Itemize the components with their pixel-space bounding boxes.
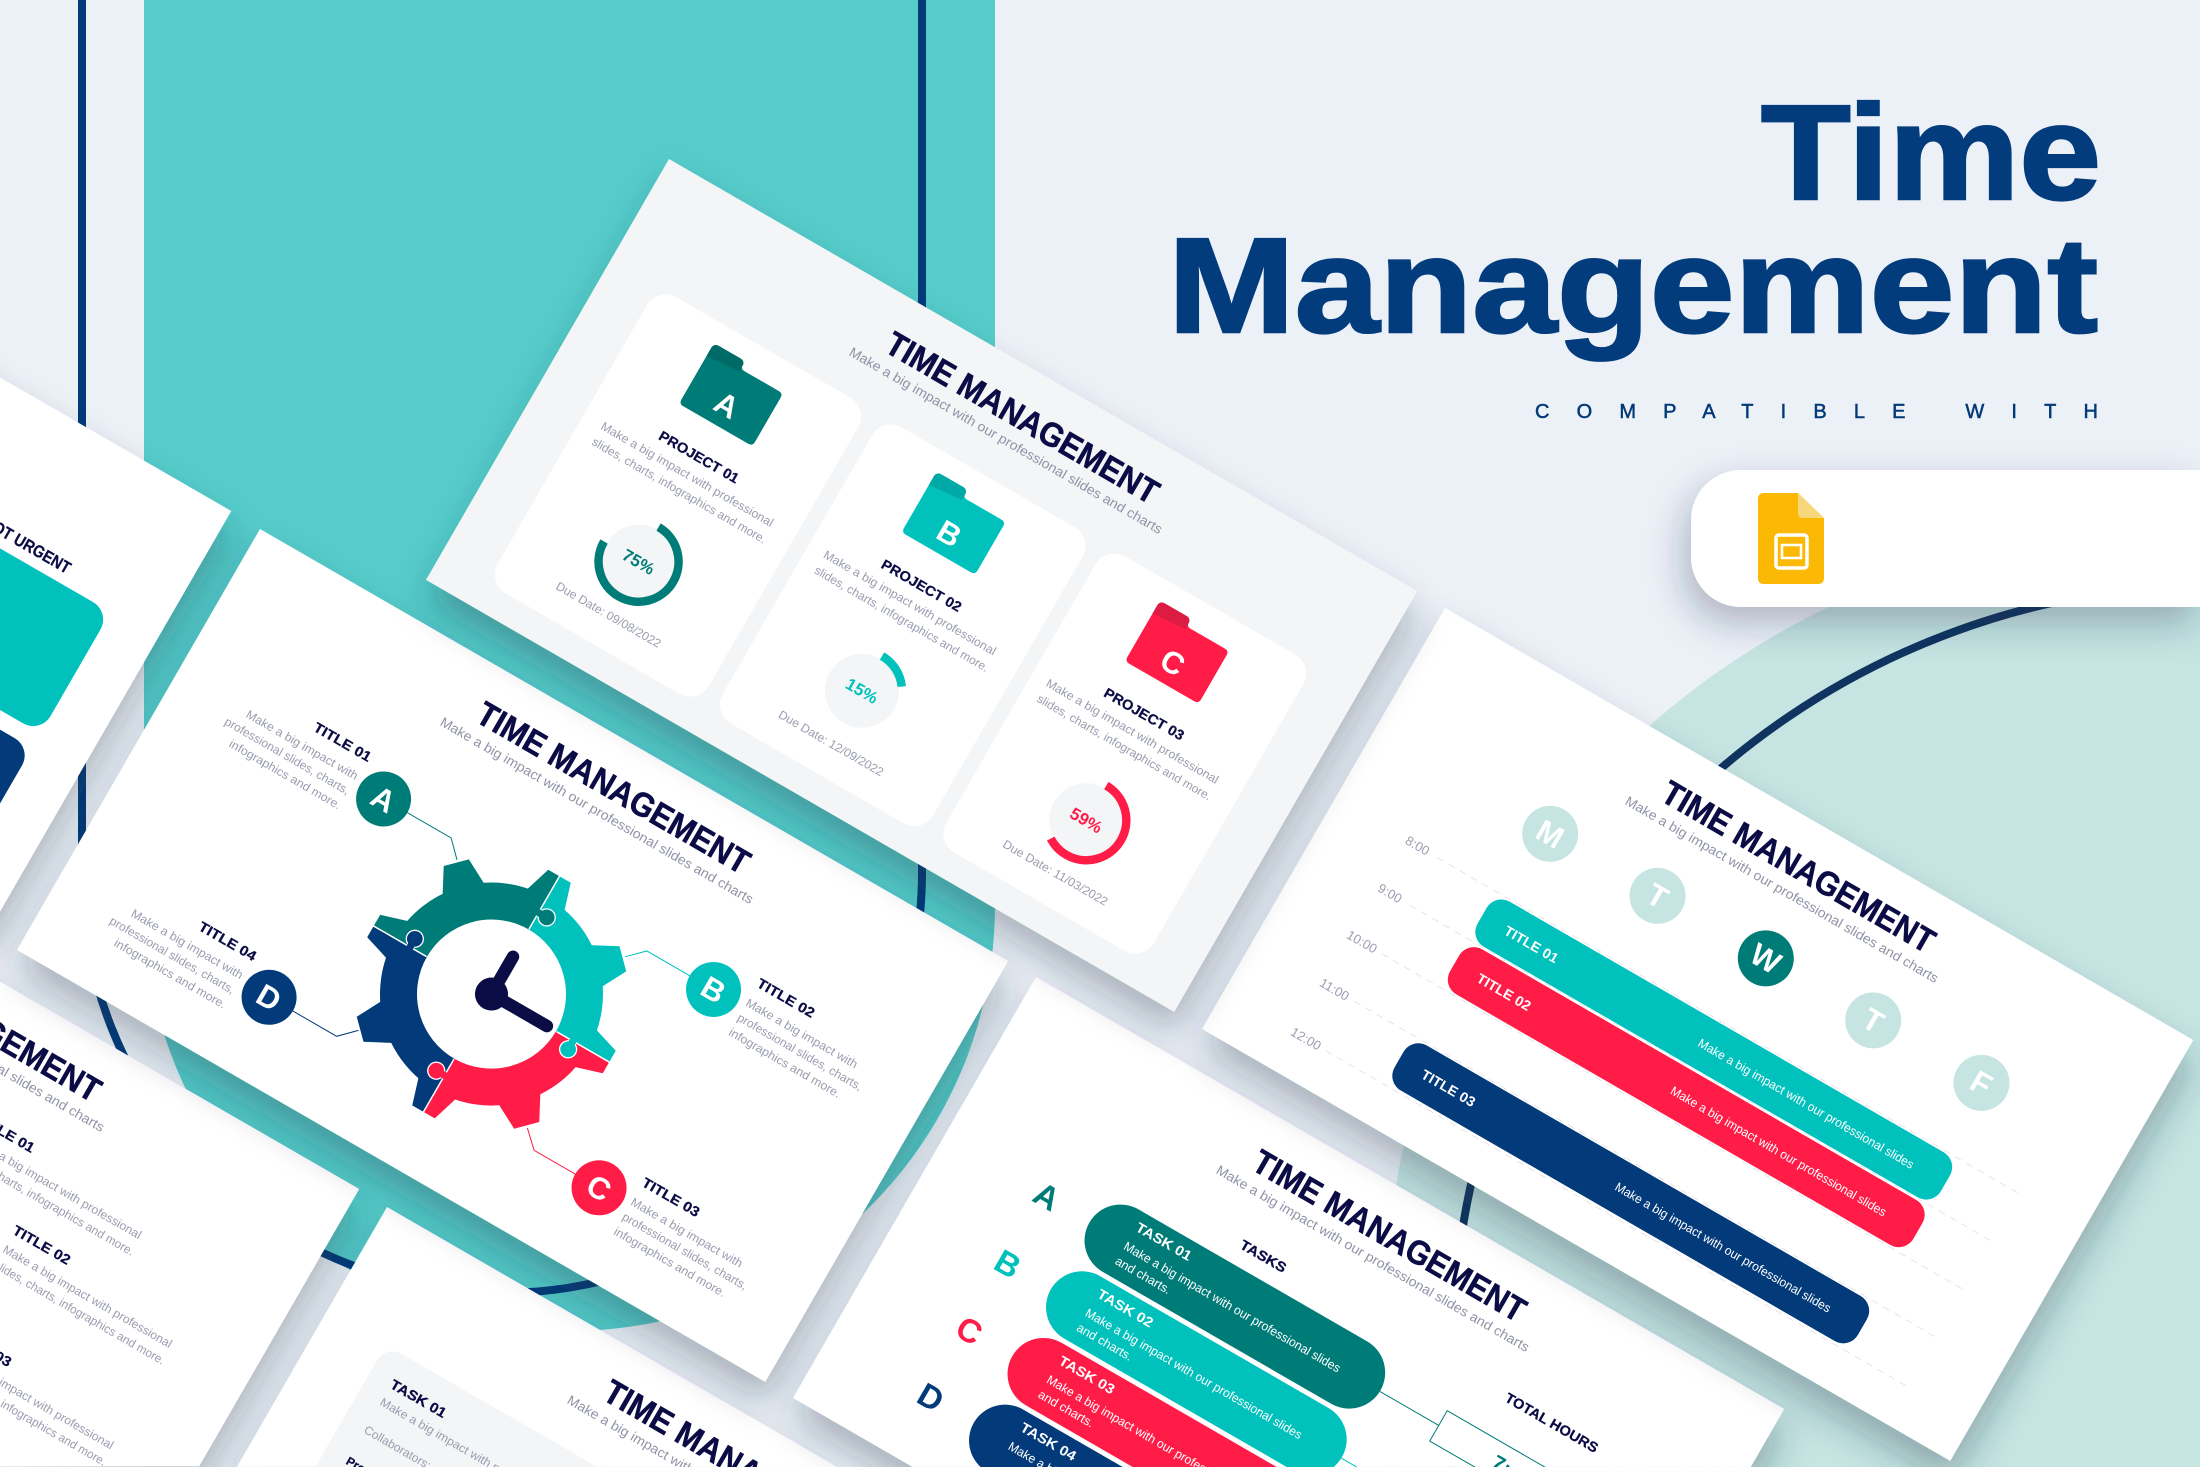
pill: task 02 (1033, 1258, 1360, 1467)
heading: TIME MANAGEMENT (1246, 1143, 1533, 1330)
text block: title 01: professional slides, charts, (222, 714, 352, 798)
pill: task 02: Make a big impact with our professional slides (1083, 1306, 1305, 1442)
pill: task 04 (956, 1391, 1283, 1467)
donut: 75% (584, 507, 693, 616)
icon: folder C: C (1154, 642, 1191, 684)
card: project 01: Make a big impact with professional (598, 419, 776, 530)
text block: title 04: TITLE 04 (196, 918, 260, 964)
donut: 75%: 75% (619, 545, 658, 579)
card: project 01: Due Date: 09/08/2022 (553, 579, 664, 651)
row letters: D (911, 1375, 950, 1419)
pill: task 04: TASK 04 (1018, 1419, 1079, 1464)
teal quadrant card (0, 490, 110, 733)
text block: title 03 (611, 1174, 770, 1307)
text block: title 02 (726, 975, 885, 1108)
icon: folder C (1125, 601, 1234, 704)
item: title 03 (0, 1324, 129, 1467)
card: project 01: PROJECT 01 (656, 428, 742, 486)
text block: title 01: TITLE 01 (311, 719, 375, 765)
slide: titles list (cropped left) (0, 757, 359, 1467)
donut: 15%: 15% (842, 674, 881, 708)
pill: task 02: TASK 02 (1095, 1286, 1156, 1331)
node A: A (365, 779, 402, 820)
gear segment: red (423, 994, 609, 1180)
donut: 15% (807, 636, 917, 745)
day circles (1512, 796, 2020, 1121)
node A (346, 761, 421, 837)
subheading: Make a big impact with our professional slides and charts (438, 714, 756, 907)
subheading: Make a big impact with our professional slides and charts (1214, 1162, 1532, 1355)
card: project 03: slides, charts, infographics and more. (1035, 692, 1214, 803)
bar: title 02: TITLE 02 (1474, 970, 1534, 1014)
text block: title 01: Make a big impact with (244, 707, 361, 783)
pill: task 03 (994, 1325, 1321, 1467)
pill: task 03: and charts. (1036, 1387, 1096, 1430)
text block: title 02: TITLE 02 (754, 975, 818, 1021)
puzzle joints (304, 807, 679, 1181)
bar: title 03 (1386, 1037, 1875, 1350)
text block: title 01: infographics and more. (227, 737, 344, 812)
subheading: Make a big impact with our professional slides and charts (847, 344, 1165, 537)
node D: D (250, 977, 287, 1018)
icon: folder B: B (931, 513, 968, 555)
card: project 02: Due Date: 12/09/2022 (776, 707, 886, 779)
text block: title 04: professional slides, charts, (107, 914, 237, 997)
text block: title 03: Make a big impact with (628, 1195, 745, 1271)
gear with clock (304, 807, 679, 1181)
time axis labels: 8:00 (1403, 833, 1432, 858)
time axis labels (1288, 831, 1435, 1053)
icon: google slides (1758, 493, 1824, 584)
text block: title 03: professional slides, charts, (620, 1210, 750, 1293)
slide background (0, 757, 359, 1467)
slide background (793, 977, 1784, 1467)
bar: title 01: Make a big impact with our professional slides (1695, 1036, 1916, 1172)
background shape: light teal circle (1386, 530, 2200, 1467)
card: project 01 (487, 286, 869, 705)
slide background (1202, 608, 2193, 1461)
item: title 02: TITLE 02 (10, 1222, 74, 1268)
icon: folder A (679, 343, 788, 446)
card: project 02: PROJECT 02 (879, 556, 965, 615)
gear segment: teal (491, 876, 677, 1062)
bar: title 03: TITLE 03 (1418, 1066, 1479, 1110)
background shape: navy outline pill (82, 0, 922, 1293)
icon: folder A: A (708, 385, 745, 426)
compatible with label: COMPATIBLE WITH (1535, 401, 2098, 423)
item: title 02 (0, 1222, 188, 1367)
card: project 03 (935, 545, 1314, 962)
item: title 02: Make a big impact with professional (0, 1242, 175, 1351)
icon: folder B (902, 472, 1010, 575)
day circles: M (1530, 813, 1570, 856)
slide background (0, 79, 231, 932)
row letters: A (1027, 1174, 1066, 1218)
node C (561, 1150, 637, 1225)
main title (1168, 77, 2101, 361)
donut: 59% (1032, 766, 1141, 875)
main title: Time (1761, 77, 2101, 228)
item: title 01 (0, 1110, 157, 1259)
connector lines (292, 812, 690, 1174)
gear segment: navy (306, 926, 491, 1112)
node C: C (580, 1167, 617, 1209)
text block: title 02: Make a big impact with (743, 996, 860, 1071)
pill: task 01: TASK 01 (1133, 1219, 1195, 1264)
pill: task 02: and charts. (1074, 1321, 1135, 1364)
text block: title 04: Make a big impact with (129, 906, 246, 982)
text block: title 03: infographics and more. (611, 1224, 728, 1300)
slide background (426, 159, 1417, 1012)
pill: task 01: and charts. (1113, 1254, 1173, 1297)
hours box: row 1 (1371, 1377, 1614, 1467)
time axis labels: 12:00 (1288, 1024, 1324, 1053)
text block: title 04: infographics and more. (112, 936, 229, 1011)
bar: title 02 (1442, 941, 1931, 1253)
slide: urgency matrix (cropped left) (0, 79, 231, 932)
node D (232, 960, 307, 1035)
slide: task cards (cropped bottom) (157, 1207, 917, 1467)
card: project 03: Due Date: 11/03/2022 (1000, 837, 1111, 909)
main title: Management (1168, 210, 2098, 361)
day circles: F (1964, 1063, 1998, 1103)
slide: gear clock (17, 529, 1008, 1382)
pill: task 01: Make a big impact with our professional slides (1121, 1239, 1343, 1375)
day circles: T (1640, 876, 1674, 916)
text block: title 02: professional slides, charts, (735, 1010, 865, 1094)
time axis labels: 9:00 (1375, 880, 1405, 906)
bar: title 01 (1469, 893, 1958, 1206)
background shape: teal pill (144, 0, 995, 1331)
card: project 01: slides, charts, infographics and more. (589, 435, 769, 546)
card: project 02: Make a big impact with professional (821, 548, 999, 658)
text block: title 02: infographics and more. (726, 1025, 843, 1101)
row letters (911, 1174, 1066, 1419)
slide background (237, 1207, 837, 1467)
card: project 02: slides, charts, infographics and more. (812, 563, 991, 675)
pill: task 01 (1071, 1191, 1398, 1422)
donut: 59%: 59% (1067, 804, 1106, 837)
heading: TIME MANAGEMENT (1655, 774, 1942, 961)
navy quadrant card (0, 626, 32, 869)
task card: TASK 01 (388, 1376, 450, 1421)
gear segment: green (374, 808, 559, 994)
slide: weekly schedule (1202, 608, 2193, 1461)
time axis labels: 11:00 (1317, 975, 1352, 1004)
connector: row 2 (1341, 1458, 1367, 1467)
column label: total hours: TOTAL HOURS (1502, 1389, 1601, 1456)
background shape: navy arc (1453, 585, 2200, 1467)
bar: title 01: TITLE 01 (1501, 922, 1562, 966)
node B: B (695, 969, 732, 1011)
node B (676, 952, 751, 1027)
card: project 03: Make a big impact with professional (1044, 676, 1221, 787)
pill: task 03: TASK 03 (1056, 1352, 1118, 1397)
task card (216, 1339, 610, 1467)
day circles: T (1856, 1001, 1890, 1041)
text block: title 04 (99, 878, 260, 1013)
subheading: Make a big impact with our professional slides and charts (1623, 793, 1941, 986)
text block: title 01 (214, 679, 375, 813)
text block: title 03: TITLE 03 (639, 1174, 703, 1220)
bar: title 03: Make a big impact with our professional slides (1612, 1180, 1833, 1315)
row letters: C (950, 1309, 989, 1352)
time axis labels: 10:00 (1344, 927, 1380, 956)
clock hands (469, 949, 568, 1040)
day circles: W (1744, 936, 1788, 982)
heading: TIME MANAGEMENT (470, 695, 757, 882)
card: project 03: PROJECT 03 (1101, 685, 1187, 743)
slide background (17, 529, 1008, 1382)
bar: title 02: Make a big impact with our professional slides (1668, 1084, 1889, 1219)
heading: TIME MANAGEMENT (879, 325, 1166, 512)
white pill badge (1691, 470, 2200, 607)
slide: projects (426, 159, 1417, 1012)
card: project 02 (712, 416, 1093, 834)
row letters: B (988, 1242, 1027, 1286)
slide: tasks and total hours (793, 977, 1784, 1467)
column label: tasks: TASKS (1237, 1236, 1290, 1276)
